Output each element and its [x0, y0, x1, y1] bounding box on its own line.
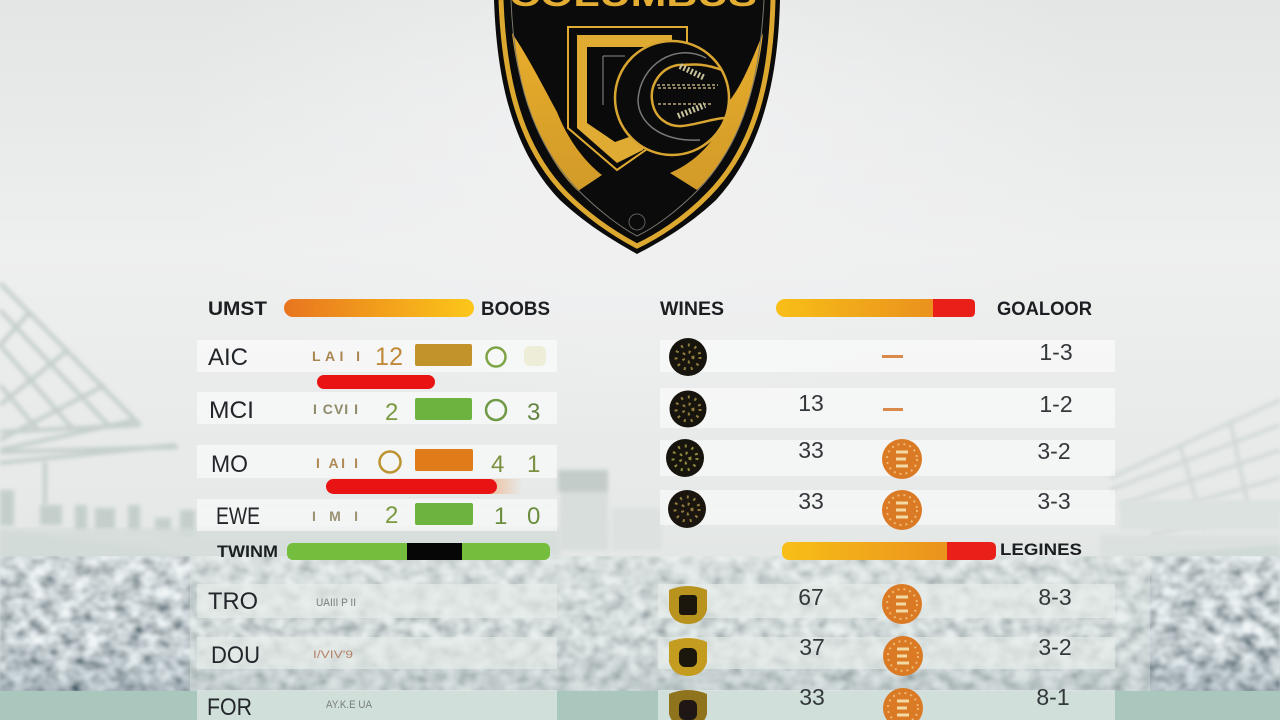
value 67: 67	[798, 584, 824, 610]
score 1-3: 1-3	[1039, 339, 1073, 365]
row DOU	[211, 642, 353, 669]
row DOU: DOU	[211, 642, 260, 669]
panel: left table rows	[197, 340, 557, 531]
row EWE: EWE	[216, 503, 260, 530]
score 3-2: 3-2	[1037, 438, 1071, 464]
row TRO: TRO	[208, 588, 258, 615]
row EWE: 0	[527, 503, 540, 530]
crest ball emblem	[615, 41, 729, 155]
row AIC: AIC	[208, 344, 248, 371]
row EWE: I M I	[312, 508, 358, 524]
panel: lower right table	[658, 584, 1115, 720]
row DOU: I/VIV'9	[313, 649, 353, 661]
legend bar: TWINM: TWINM	[217, 542, 278, 561]
club crest shield	[494, 0, 780, 254]
row MO: MO	[211, 451, 248, 478]
crest inner thin line	[511, 0, 764, 236]
row AIC: 12	[375, 343, 403, 371]
crest inner shield	[568, 27, 687, 170]
row MCI	[209, 397, 540, 426]
row EWE: 1	[494, 503, 507, 530]
score 3-3: 3-3	[1037, 488, 1071, 514]
score 3-2: 3-2	[1038, 634, 1072, 660]
row MO	[211, 449, 540, 478]
row EWE	[216, 502, 540, 530]
panel: right table rows	[660, 338, 1115, 530]
icon: club disc 2	[670, 390, 706, 428]
stand edge band	[0, 530, 1280, 575]
legend bar: TWINM	[217, 542, 550, 561]
icon: orange medal 1	[882, 439, 922, 479]
crowd	[0, 556, 1280, 692]
row AIC: LAI I	[312, 348, 360, 364]
row EWE: 2	[385, 502, 398, 529]
score 8-1: 8-1	[1036, 684, 1070, 710]
value 37: 37	[799, 634, 825, 660]
icon: orange medal 3	[882, 584, 922, 624]
panel: left table header: BOOBS	[481, 299, 550, 320]
dash: row 2	[883, 408, 903, 411]
icon: club disc 4	[668, 490, 706, 528]
row TRO	[208, 588, 356, 615]
panel: lower left table	[197, 584, 557, 720]
row AIC	[208, 343, 546, 371]
row MCI: MCI	[209, 397, 254, 424]
panel: right table header: GOALOOR	[997, 299, 1092, 320]
panel: right table header: WINES	[660, 299, 724, 320]
row MO: I AI I	[316, 455, 358, 471]
legend bar: leagues: LEGINES	[1000, 540, 1082, 559]
legend bar: leagues	[782, 540, 1082, 560]
icon: gold badge 1	[669, 586, 707, 624]
red bar: MO	[326, 479, 522, 494]
stadium roof left	[0, 283, 178, 505]
panel: right table header	[660, 299, 1092, 320]
dash: row 1	[882, 355, 903, 358]
icon: orange medal 2	[882, 490, 922, 530]
panel: left table header: UMST	[208, 299, 267, 320]
red bar: AIC	[317, 375, 435, 389]
pitch	[0, 691, 1280, 720]
icon: club disc 3	[666, 439, 704, 477]
figures on upper stand	[0, 490, 1280, 536]
stadium structures center	[558, 470, 1280, 557]
score 8-3: 8-3	[1038, 584, 1072, 610]
stadium roof right	[1110, 400, 1280, 535]
crest small ball	[629, 214, 645, 230]
icon: gold badge 3	[669, 690, 707, 720]
row MO: 1	[527, 451, 540, 478]
row MCI: 3	[527, 399, 540, 426]
row MO: 4	[491, 451, 504, 478]
row MCI: 2	[385, 399, 398, 426]
icon: orange medal 5	[883, 688, 923, 720]
value 33: 33	[798, 437, 824, 463]
icon: club disc 1	[669, 338, 707, 376]
crest gold wings	[512, 33, 602, 191]
value 13: 13	[798, 390, 824, 416]
value 33: 33	[798, 488, 824, 514]
panel: left table header	[208, 299, 550, 320]
icon: gold badge 2	[669, 638, 707, 676]
value 33: 33	[799, 684, 825, 710]
row FOR	[207, 694, 373, 720]
row MCI: I CVI I	[313, 401, 358, 417]
icon: orange medal 4	[883, 636, 923, 676]
row TRO: UAIII P II	[316, 597, 356, 609]
row FOR: AY.K.E UA	[326, 699, 373, 711]
score 1-2: 1-2	[1039, 391, 1073, 417]
